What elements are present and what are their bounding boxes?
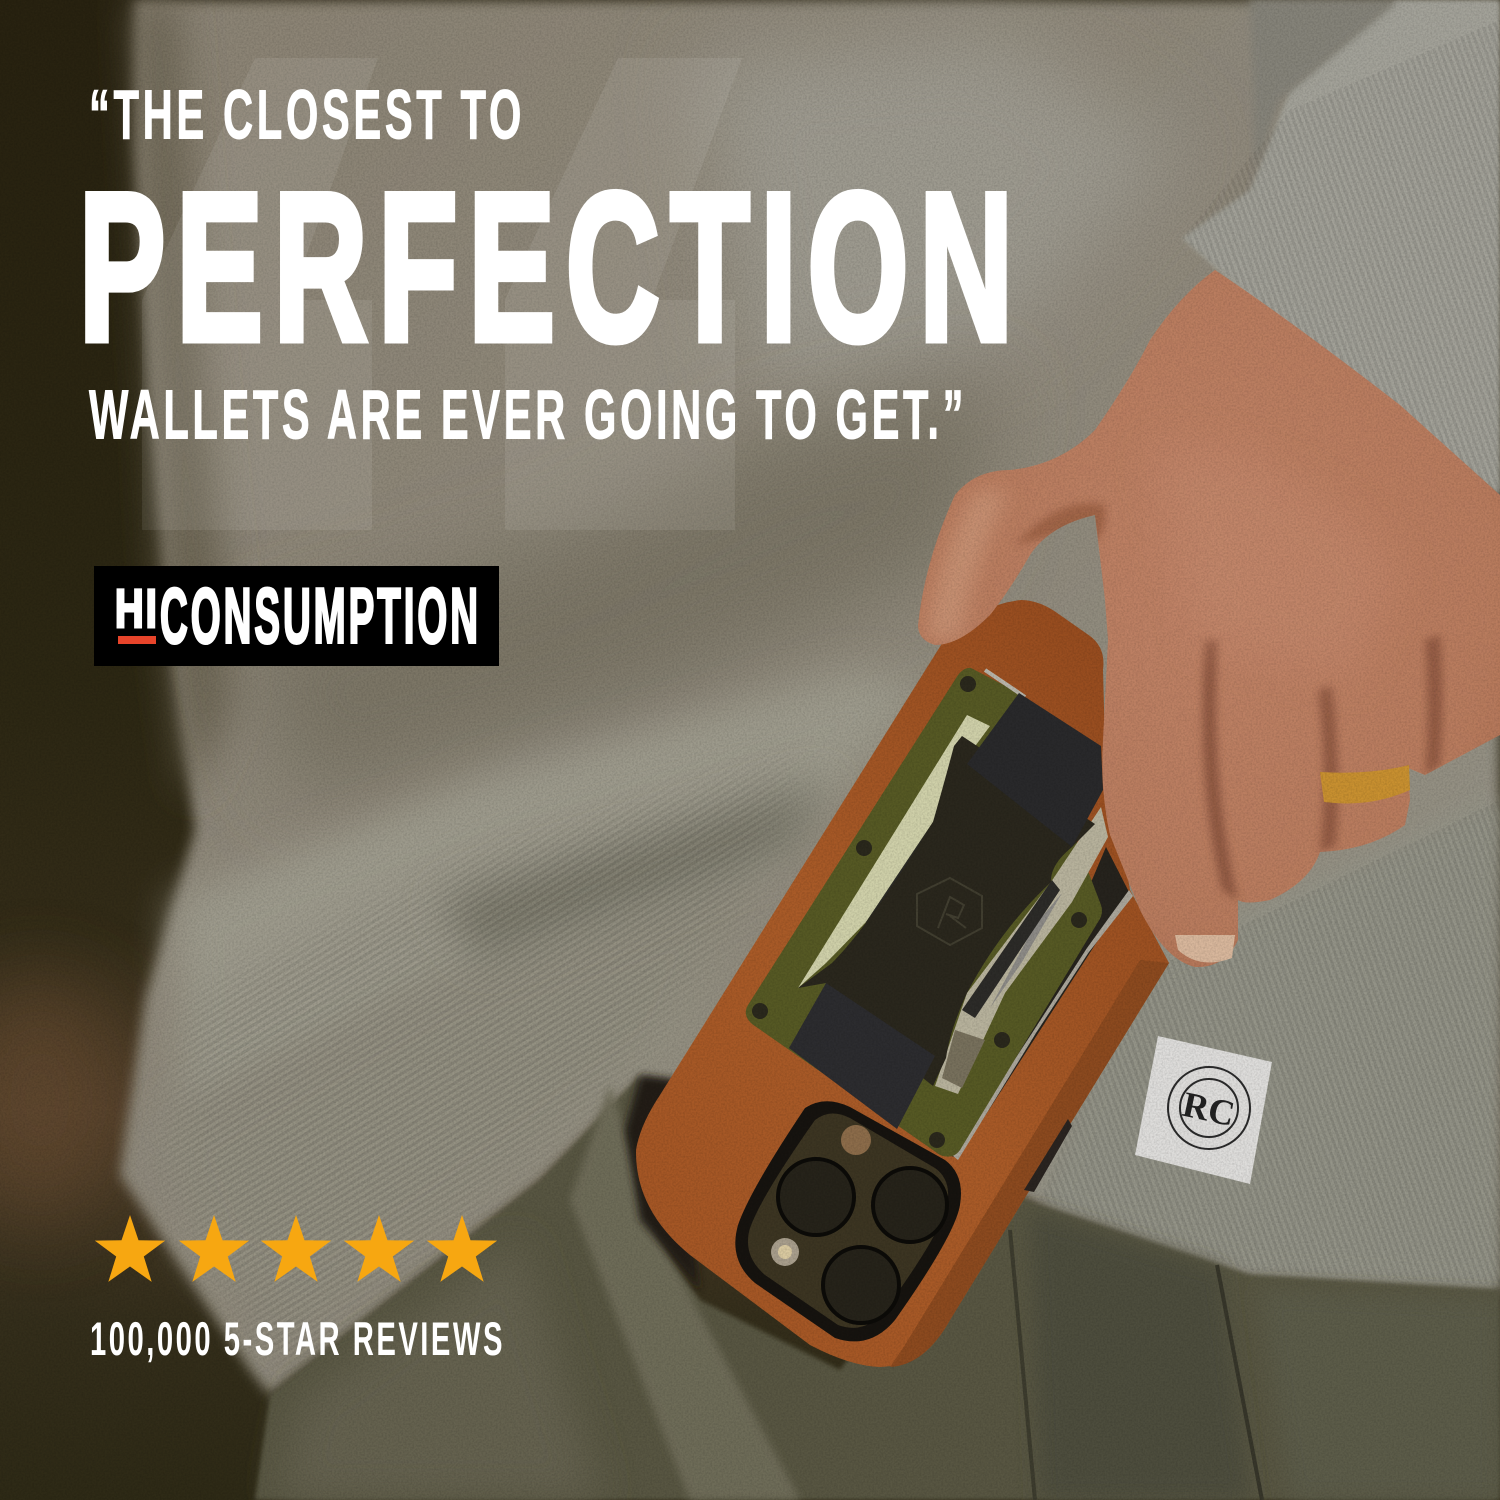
- photo: sweatshirt sleeve cuff: [1182, 0, 1500, 495]
- quote line one: “THE CLOSEST TO: [89, 76, 525, 154]
- watermark quotation marks: [142, 58, 742, 530]
- review count caption: 100,000 5-STAR REVIEWS: [90, 1312, 505, 1365]
- logo: HiConsumption: HI: [115, 579, 159, 639]
- photo: olive trousers and pocket: [255, 1075, 1500, 1500]
- logo: HiConsumption: [94, 566, 499, 666]
- hand holding phone: [900, 260, 1500, 980]
- woven sweatshirt label: RC: [1179, 1084, 1238, 1134]
- wallet black clip with hexagon logo: [798, 736, 1095, 1086]
- five star rating: [95, 1215, 497, 1282]
- phone in leather case: [636, 600, 1169, 1367]
- wallet elastic bands: [789, 693, 1103, 1129]
- woven sweatshirt label: [1135, 1036, 1272, 1184]
- logo: HiConsumption: CONSUMPTION: [160, 572, 481, 660]
- wallet plate: [746, 668, 1108, 1157]
- camera module: [735, 1101, 961, 1341]
